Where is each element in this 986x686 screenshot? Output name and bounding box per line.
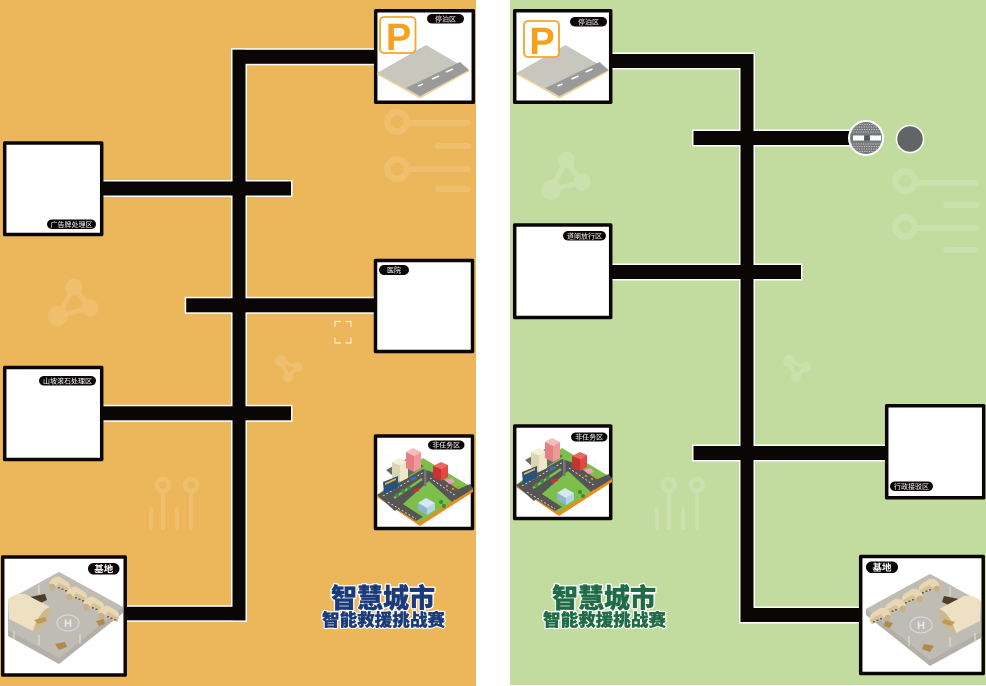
title: left board: 智能救援挑战赛: [322, 610, 445, 630]
zone: rockfall, left board: [5, 368, 102, 460]
zone: parking, left board: [376, 11, 473, 102]
icon: parking sign: P: [529, 21, 555, 63]
zone: hospital, left board: [376, 260, 472, 352]
title: left board: 智慧城市: [331, 583, 435, 614]
decorative circuit icons: right panel: [657, 171, 976, 528]
base illustration: [866, 574, 981, 666]
label: rockfall zone: 山坡滚石处理区: [43, 376, 92, 385]
panel: left orange board: [0, 0, 476, 686]
base illustration: [8, 572, 123, 664]
icon: manhole cover: [848, 120, 884, 156]
title: right board: 智慧城市: [552, 583, 656, 614]
panel: right green board: [510, 0, 986, 685]
title: right board: 智能救援挑战赛: [543, 610, 666, 630]
title: left board: 智能救援挑战赛: [322, 610, 445, 630]
title: right board: [543, 583, 666, 630]
label: billboard zone: 广告牌处理区: [50, 220, 92, 229]
label: parking zone: 停泊区: [435, 14, 456, 23]
zone: non-mission, right board: [515, 426, 612, 518]
decorative circuit icons: left panel: [151, 112, 468, 528]
title: right board: 智能救援挑战赛: [543, 610, 666, 630]
zone: parking, right board: [515, 11, 611, 102]
city illustration: [516, 438, 612, 516]
label: hospital: 医院: [387, 266, 401, 274]
city illustration: [377, 448, 473, 526]
zone: base, left board: [3, 557, 125, 675]
zone: barrier gate, right board: [515, 225, 611, 318]
title: left board: [322, 583, 445, 630]
zone: base, right board: [861, 556, 983, 674]
zone: billboard, left board: [5, 143, 102, 234]
label: barrier gate zone: 道闸放行区: [567, 231, 602, 240]
icon: grey circle marker: [896, 126, 924, 152]
decorative network icons: right panel: [542, 152, 810, 382]
road network: right board: [610, 52, 887, 624]
title: right board: 智慧城市: [552, 583, 656, 614]
label: base: 基地: [94, 563, 114, 575]
label: non-mission zone: 非任务区: [432, 441, 460, 450]
label: non-mission zone: 非任务区: [575, 433, 603, 442]
label: parking zone: 停泊区: [578, 17, 599, 26]
zone: non-mission, left board: [376, 436, 473, 528]
icon: scan bracket: [335, 322, 351, 343]
title: left board: 智慧城市: [331, 583, 435, 614]
icon: parking sign: P: [386, 17, 411, 59]
parking road illustration: [516, 45, 608, 98]
zone: administrative, right board: [887, 406, 984, 498]
parking road illustration: [377, 45, 469, 98]
road network: left board: [102, 48, 375, 622]
label: administrative zone: 行政接驳区: [894, 482, 929, 491]
label: base: 基地: [872, 562, 892, 574]
decorative network icons: left panel: [48, 279, 302, 382]
